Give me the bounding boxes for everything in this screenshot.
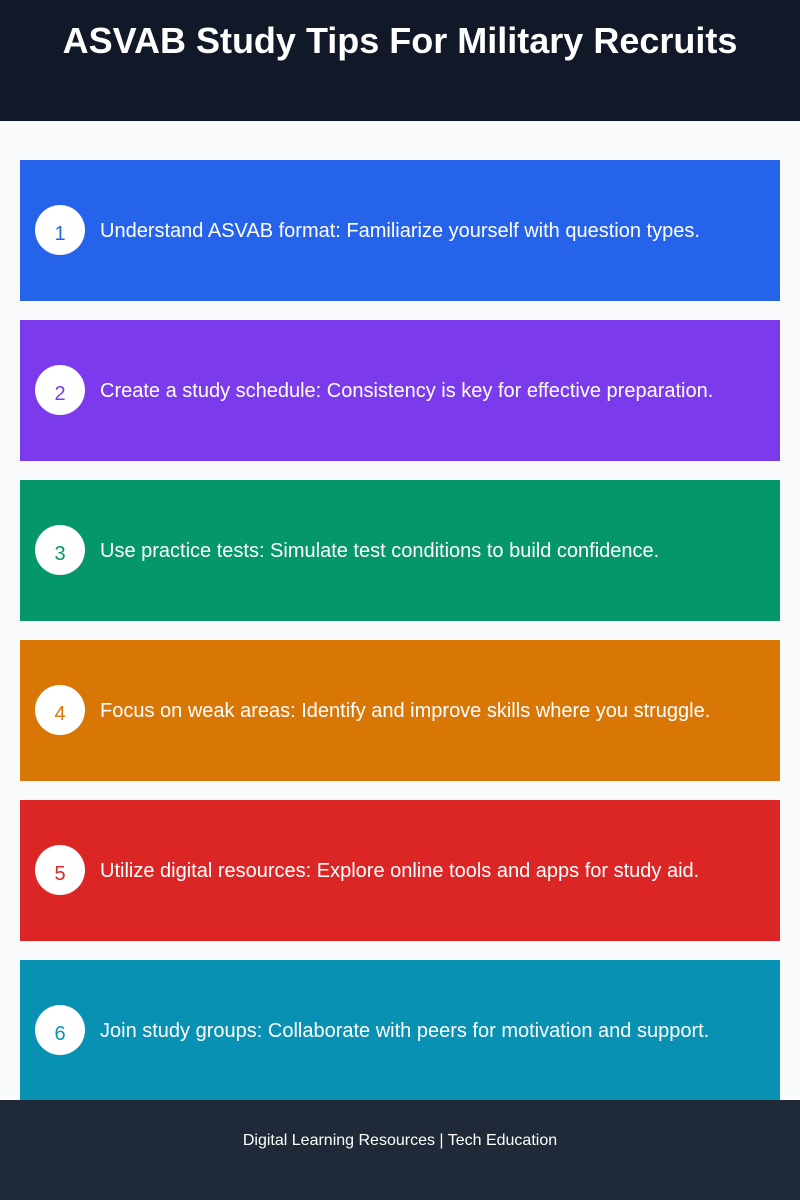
text: tip 1: Understand ASVAB format: Familiarize yourself with question types.: [100, 220, 700, 242]
header band: [0, 0, 800, 121]
icon: number 6: [35, 1005, 85, 1055]
text: tip 6: Join study groups: Collaborate with peers for motivation and support.: [100, 1020, 709, 1042]
icon: number 1: 1: [54, 223, 66, 245]
panel: tip 6: [20, 960, 780, 1101]
icon: number 3: [35, 525, 85, 575]
icon: number 4: 4: [54, 703, 66, 725]
text: tip 5: Utilize digital resources: Explore online tools and apps for study aid.: [100, 860, 699, 882]
panel: tip 1: [20, 160, 780, 301]
panel: tip 5: [20, 800, 780, 941]
icon: number 4: [35, 685, 85, 735]
panel: tip 3: [20, 480, 780, 621]
icon: number 6: 6: [54, 1023, 66, 1045]
icon: number 2: [35, 365, 85, 415]
icon: number 5: [35, 845, 85, 895]
text: tip 3: Use practice tests: Simulate test conditions to build confidence.: [100, 540, 659, 562]
icon: number 5: 5: [54, 863, 66, 885]
footer: [0, 1100, 800, 1200]
icon: number 2: 2: [54, 383, 66, 405]
panel: tip 4: [20, 640, 780, 781]
icon: number 3: 3: [54, 543, 66, 565]
title: ASVAB Study Tips For Military Recruits: [63, 20, 737, 61]
icon: number 1: [35, 205, 85, 255]
footer text: Digital Learning Resources | Tech Education: [243, 1132, 557, 1149]
text: tip 2: Create a study schedule: Consistency is key for effective preparation.: [100, 380, 713, 402]
panel: tip 2: [20, 320, 780, 461]
text: tip 4: Focus on weak areas: Identify and improve skills where you struggle.: [100, 700, 710, 722]
